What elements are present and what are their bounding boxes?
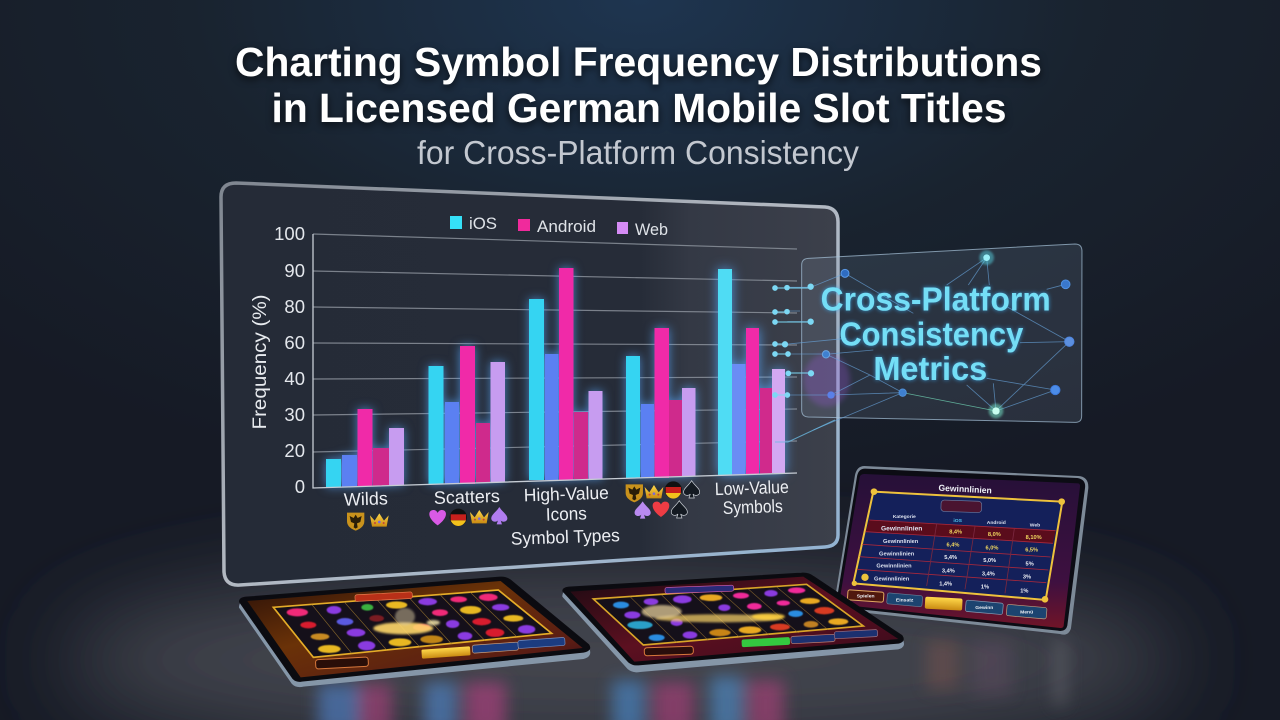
- game title: [355, 592, 412, 601]
- panel: chart screen: [221, 183, 838, 585]
- table text: 3,4%: [942, 568, 955, 574]
- title: [235, 39, 1042, 131]
- reel symbols: [613, 587, 848, 641]
- bars: Low-Value Symbols: [718, 269, 785, 475]
- floor reflections: [318, 640, 1067, 720]
- table text: Gewinnlinien: [876, 564, 912, 570]
- connector dots: [773, 284, 814, 397]
- y axis tick labels: 40: [284, 368, 305, 389]
- table buttons: Einsatz: [896, 598, 914, 604]
- table buttons: Menü: [1020, 609, 1033, 615]
- x axis labels: Symbol Types: [511, 525, 620, 549]
- table text: 8,10%: [1026, 535, 1042, 541]
- table text: 1%: [981, 585, 989, 591]
- y axis tick labels: 0: [295, 476, 305, 497]
- x axis labels: [344, 477, 789, 549]
- card heading: [821, 281, 1051, 388]
- legend: iOS: [469, 214, 497, 233]
- table text: Gewinnlinien: [881, 526, 922, 533]
- y axis tick labels: 30: [284, 404, 305, 425]
- y axis tick labels: 60: [284, 332, 305, 353]
- table text: Gewinnlinien: [883, 539, 919, 545]
- table text: Android: [987, 520, 1006, 526]
- bars: fourth group: [626, 328, 696, 478]
- x axis labels: High-Value: [524, 483, 609, 505]
- table buttons: [847, 590, 1047, 619]
- card heading: Consistency: [839, 316, 1024, 353]
- y axis title: Frequency (%): [250, 294, 271, 430]
- table text: 6,4%: [947, 542, 959, 548]
- table text: 8,4%: [949, 530, 962, 536]
- table text: 6,0%: [986, 545, 998, 551]
- table title: Gewinnlinien: [938, 483, 992, 495]
- reel symbols: [287, 594, 535, 653]
- y axis tick labels: [274, 223, 305, 497]
- game buttons: [315, 637, 565, 669]
- game buttons: [644, 630, 878, 656]
- card heading: Metrics: [873, 351, 987, 388]
- connector to lower chart: [775, 420, 835, 442]
- subtitle: for Cross-Platform Consistency: [417, 134, 859, 171]
- legend: Web: [635, 220, 668, 239]
- reel board: [273, 590, 552, 657]
- tablet screen: [839, 474, 1080, 628]
- tablet body: [834, 466, 1088, 635]
- network lines: [785, 258, 1069, 430]
- table text: 8,0%: [988, 532, 1001, 538]
- gold corner ornaments: [852, 488, 1065, 603]
- table text: [874, 514, 1042, 594]
- bars: Scatters: [428, 346, 505, 484]
- device: tablet with reels 2: [563, 574, 903, 671]
- table text: 1%: [1020, 588, 1028, 594]
- game title: [665, 585, 734, 594]
- x axis labels: Low-Value: [715, 477, 789, 499]
- x axis labels: Symbols: [723, 496, 783, 518]
- table text: 5,0%: [983, 558, 996, 564]
- table text: Gewinnlinien: [879, 552, 915, 558]
- axes: [313, 234, 797, 488]
- bars: Wilds: [326, 409, 404, 487]
- table text: 3%: [1023, 575, 1031, 581]
- title: Charting Symbol Frequency Distributions: [235, 39, 1042, 85]
- gridlines: [313, 234, 797, 452]
- device: tablet with reels 1: [240, 578, 589, 686]
- table text: 5%: [1026, 561, 1034, 567]
- bars: High-Value Icons: [529, 268, 602, 480]
- glass card: [802, 244, 1082, 422]
- reel board: [593, 584, 863, 645]
- y axis tick labels: 100: [274, 223, 305, 244]
- table text: iOS: [953, 518, 963, 524]
- x axis labels: Icons: [546, 503, 587, 525]
- sparkle burst: [373, 608, 440, 634]
- tablet screen: [247, 581, 583, 677]
- device: tablet with results table: [834, 466, 1088, 635]
- table text: Kategorie: [893, 514, 916, 520]
- sparkle burst: [642, 605, 785, 622]
- reel separators: [630, 587, 828, 642]
- y axis tick labels: 80: [284, 296, 305, 317]
- hub nodes: [822, 250, 1074, 418]
- card heading: Cross-Platform: [821, 281, 1051, 318]
- y axis tick labels: 20: [284, 440, 305, 461]
- x axis labels: Wilds: [344, 488, 388, 510]
- legend: Android: [537, 217, 596, 236]
- purple glow: [803, 353, 850, 407]
- panel glass: [221, 183, 838, 585]
- table board: [853, 492, 1062, 600]
- table text: 1,4%: [939, 582, 952, 588]
- x axis labels: Scatters: [434, 486, 500, 508]
- table text: Gewinnlinien: [874, 577, 910, 583]
- table pill: [941, 500, 982, 513]
- table text: 3,4%: [982, 571, 995, 577]
- title: in Licensed German Mobile Slot Titles: [272, 85, 1006, 131]
- table grid: [857, 520, 1056, 593]
- tablet body: [563, 576, 903, 671]
- tablet body: [240, 581, 589, 686]
- table buttons: Gewinn: [975, 605, 993, 611]
- y axis tick labels: 90: [284, 260, 305, 281]
- symbol icons: [347, 481, 700, 531]
- table text: 6,5%: [1025, 548, 1038, 554]
- top table row: [866, 520, 1056, 543]
- table text: 5,4%: [944, 555, 957, 561]
- table buttons: Spielen: [857, 594, 875, 600]
- tablet screen: [570, 577, 898, 662]
- table text: Web: [1030, 523, 1040, 529]
- legend: [450, 214, 668, 239]
- panel: cross-platform consistency metrics: [773, 244, 1082, 430]
- reel separators: [312, 592, 517, 653]
